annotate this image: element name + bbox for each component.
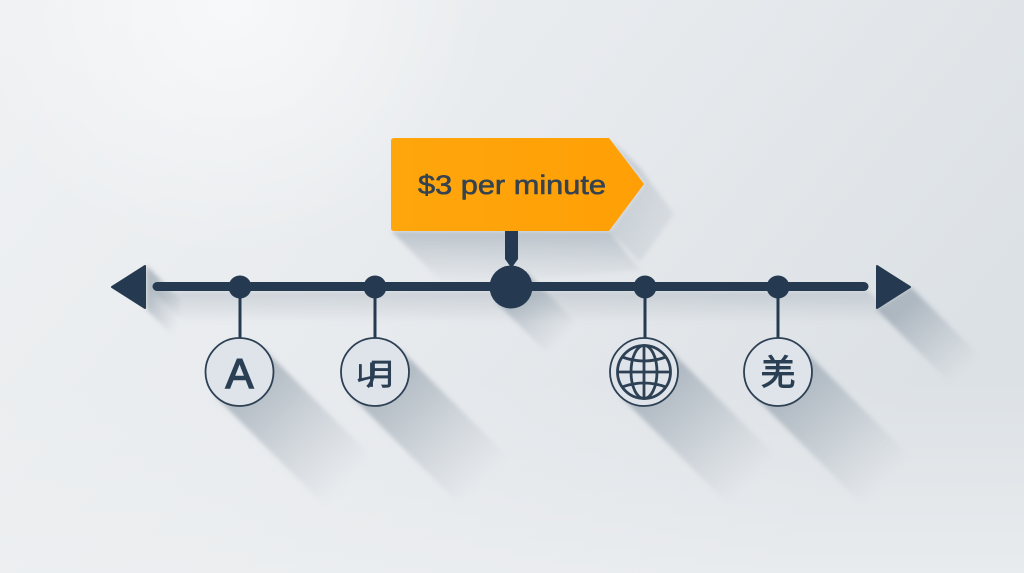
arrow: right end — [877, 266, 910, 308]
marker: CJK character: 羌 — [760, 354, 796, 393]
marker: CJK-style glyph — [341, 276, 409, 406]
price label: $3 per minute — [418, 170, 606, 200]
connector from price flag to timeline — [505, 231, 518, 266]
arrow: left end — [112, 266, 145, 308]
marker: letter A: A — [225, 350, 254, 397]
icon: globe — [618, 346, 670, 398]
marker: CJK-style glyph: ㄐ — [352, 361, 380, 391]
timeline axis — [157, 282, 864, 291]
marker: CJK character — [744, 276, 812, 406]
callout: price flag — [391, 138, 644, 231]
center marker — [490, 266, 532, 308]
marker: CJK-style glyph: 月 — [366, 359, 396, 392]
marker: letter A — [206, 276, 274, 406]
marker: globe — [610, 276, 678, 406]
long drop shadows — [146, 138, 985, 506]
